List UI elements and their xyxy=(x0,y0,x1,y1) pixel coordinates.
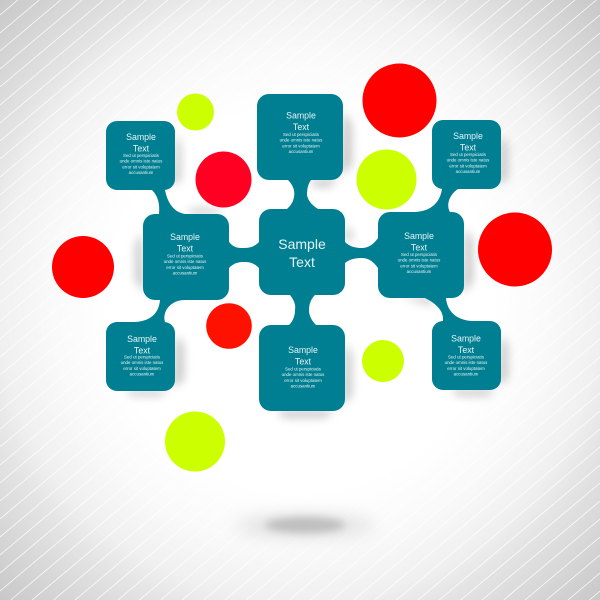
bottom body text: Sed ut perspiciatis xyxy=(285,366,321,372)
right body text: Sed ut perspiciatis xyxy=(401,252,437,257)
right body text: unde omnis iste natus xyxy=(398,258,441,263)
box shadows xyxy=(125,110,508,418)
bottom right body text: unde omnis iste natus xyxy=(445,360,488,365)
bottom left heading: Sample xyxy=(127,334,157,344)
top body text: error sit voluptatem xyxy=(282,143,320,148)
bottom left heading: Text xyxy=(134,346,151,356)
circle: lime bottom left xyxy=(165,412,225,472)
bottom right body text: error sit voluptatem xyxy=(447,366,485,371)
panel: right xyxy=(378,212,464,298)
top left body text: Sed ut perspiciatis xyxy=(123,153,159,158)
bottom body text: error sit voluptatem xyxy=(284,378,322,383)
left heading: Text xyxy=(177,244,194,254)
top right body text: accusantium xyxy=(456,169,481,174)
circle: lime upper right xyxy=(356,150,416,210)
left body text: error sit voluptatem xyxy=(166,265,204,270)
top right heading: Sample xyxy=(453,131,483,141)
bottom left body text: unde omnis iste natus xyxy=(121,360,164,365)
connectors xyxy=(135,180,472,325)
circle: red far left xyxy=(52,236,114,298)
right heading: Text xyxy=(411,242,428,252)
left heading: Sample xyxy=(170,232,200,242)
bottom right heading: Sample xyxy=(451,334,481,344)
center heading: Sample xyxy=(278,236,326,252)
top right body text: unde omnis iste natus xyxy=(447,158,490,163)
top left body text: error sit voluptatem xyxy=(122,164,160,169)
circle: red far right xyxy=(478,212,552,286)
top left body text: unde omnis iste natus xyxy=(120,159,163,164)
panel: center xyxy=(259,209,345,295)
panel: top xyxy=(257,94,343,180)
top body text: Sed ut perspiciatis xyxy=(283,132,319,137)
panel: bottom right xyxy=(432,321,501,390)
right heading: Sample xyxy=(404,231,434,241)
circle: red lower middle xyxy=(206,303,252,349)
bottom right body text: Sed ut perspiciatis xyxy=(448,354,484,360)
circle: red top right xyxy=(362,64,436,138)
bottom heading: Sample xyxy=(288,345,318,355)
bottom heading: Text xyxy=(295,356,312,366)
bottom left body text: error sit voluptatem xyxy=(123,366,161,371)
bottom right body text: accusantium xyxy=(454,372,479,377)
bottom right heading: Text xyxy=(458,345,475,355)
top left heading: Sample xyxy=(126,132,156,142)
panel: top left xyxy=(106,121,175,190)
circle: lime top left xyxy=(177,94,214,130)
top left heading: Text xyxy=(133,144,150,154)
circle: red upper left xyxy=(196,152,252,208)
bottom body text: unde omnis iste natus xyxy=(282,372,325,377)
bottom left body text: accusantium xyxy=(130,372,155,377)
left body text: unde omnis iste natus xyxy=(164,259,207,264)
top right heading: Text xyxy=(460,142,477,152)
top heading: Text xyxy=(293,122,310,132)
left body text: accusantium xyxy=(173,271,198,276)
top left body text: accusantium xyxy=(129,170,154,175)
top heading: Sample xyxy=(286,110,316,120)
floor shadow xyxy=(235,515,375,537)
bottom left body text: Sed ut perspiciatis xyxy=(124,354,160,360)
right body text: accusantium xyxy=(407,269,432,274)
bottom body text: accusantium xyxy=(291,384,316,389)
right body text: error sit voluptatem xyxy=(400,263,438,268)
top right body text: error sit voluptatem xyxy=(449,163,487,168)
top body text: accusantium xyxy=(289,149,314,154)
panel: bottom left xyxy=(106,322,175,391)
top right body text: Sed ut perspiciatis xyxy=(450,152,486,157)
panel: left xyxy=(143,214,229,300)
panel: bottom xyxy=(259,325,345,411)
left body text: Sed ut perspiciatis xyxy=(167,254,203,258)
panel: top right xyxy=(432,120,501,189)
center heading second line: Text xyxy=(289,254,315,270)
circle: lime lower right xyxy=(362,340,404,382)
top body text: unde omnis iste natus xyxy=(280,138,323,143)
